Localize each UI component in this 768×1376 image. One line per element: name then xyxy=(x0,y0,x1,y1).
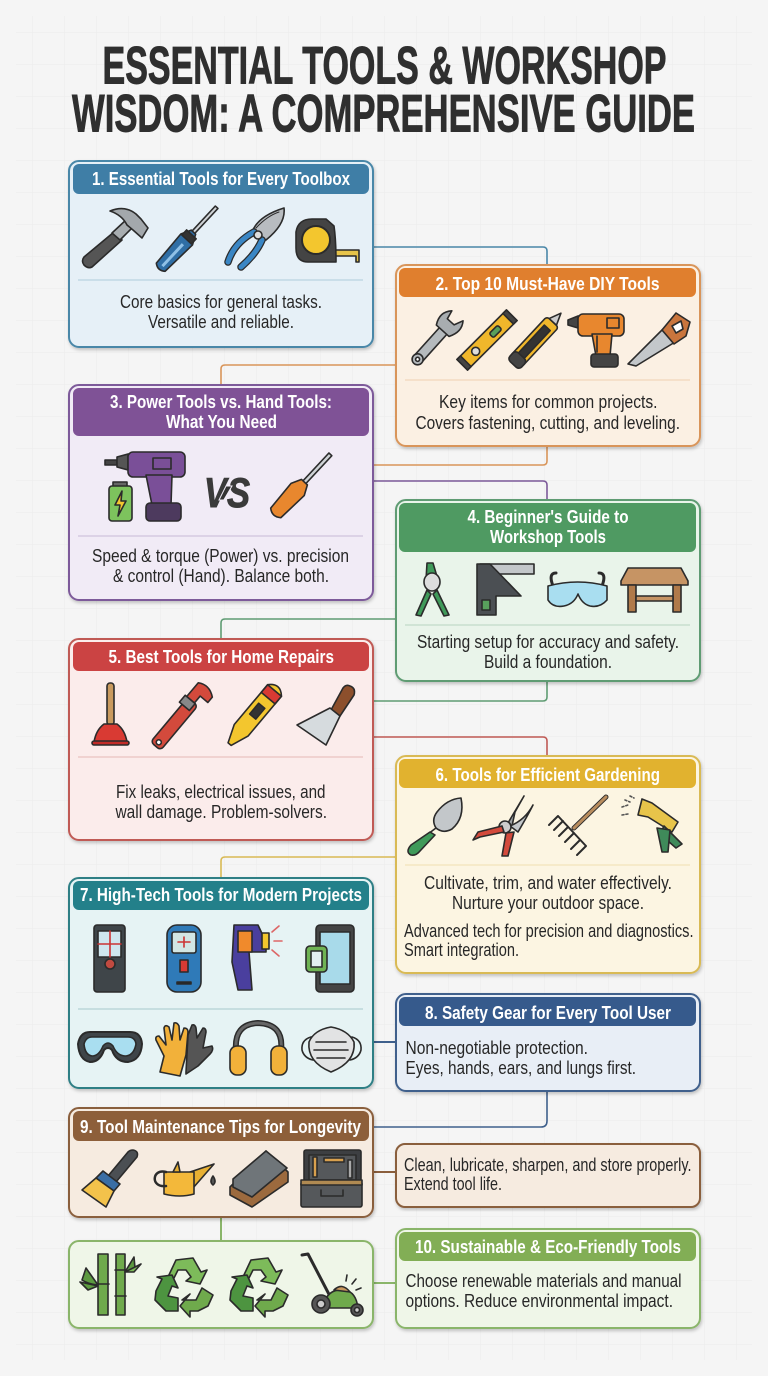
icon: dust mask xyxy=(302,1027,361,1072)
body: 4: Starting setup for accuracy and safety. xyxy=(417,631,679,652)
body: 6: Nurture your outdoor space. xyxy=(452,892,644,913)
body: 7 description: Advanced tech for precision and diagnostics. xyxy=(404,920,694,941)
header: 7: 7. High-Tech Tools for Modern Projects xyxy=(80,884,362,905)
body: 5: wall damage. Problem-solvers. xyxy=(115,801,327,822)
body: 2: Covers fastening, cutting, and leveling. xyxy=(416,412,680,433)
body: 3 xyxy=(92,545,349,586)
icon: sharpening stone xyxy=(230,1151,288,1207)
panel: 9 maintenance xyxy=(69,1108,373,1217)
icon: bamboo xyxy=(80,1254,141,1315)
icon: safety glasses xyxy=(548,573,607,606)
icon: stud finder xyxy=(167,925,201,992)
header: 1 xyxy=(73,164,369,194)
panel: 2 must-have DIY xyxy=(396,265,700,446)
icon: hand saw xyxy=(628,313,690,366)
icon: recycling symbol 1 xyxy=(155,1258,213,1317)
icon: pipe wrench xyxy=(148,679,215,754)
body: 1: Core basics for general tasks. xyxy=(120,291,322,312)
icon: push mower xyxy=(302,1254,363,1316)
body: 8: Eyes, hands, ears, and lungs first. xyxy=(406,1057,636,1078)
divider xyxy=(405,624,690,626)
panel: 1 essential tools xyxy=(69,161,373,347)
body: 6: Cultivate, trim, and water effectively. xyxy=(424,872,672,893)
panel: 7 high-tech xyxy=(69,878,373,1088)
body: 5 xyxy=(115,781,327,822)
icon: pruning shears xyxy=(473,796,533,856)
body: 1: Versatile and reliable. xyxy=(148,311,294,332)
panel: 5 home repairs xyxy=(69,639,373,840)
header: 2: 2. Top 10 Must-Have DIY Tools xyxy=(436,273,660,294)
icon: laser measure xyxy=(94,925,125,992)
body: 5: Fix leaks, electrical issues, and xyxy=(116,781,326,802)
panel: 6 gardening (with stray text) xyxy=(396,756,700,973)
icon: plunger xyxy=(92,683,129,745)
header: 3 xyxy=(73,388,369,436)
title xyxy=(72,36,695,144)
icon: paint brush xyxy=(82,1150,138,1207)
icon: workbench xyxy=(621,568,688,612)
icon: oil can xyxy=(155,1162,215,1196)
header: 4: Workshop Tools xyxy=(490,526,606,547)
body: 2: Key items for common projects. xyxy=(439,391,658,412)
header: 10: 10. Sustainable & Eco-Friendly Tools xyxy=(415,1236,681,1257)
icon: adjustable wrench xyxy=(405,307,466,371)
icon: screwdriver xyxy=(153,202,222,275)
header: 3: What You Need xyxy=(166,411,277,432)
panel: 4 beginner guide xyxy=(396,500,700,681)
body: 4: Build a foundation. xyxy=(484,651,612,672)
panel: 9 description xyxy=(396,1144,700,1207)
icon: pliers xyxy=(228,208,284,267)
body: 1 xyxy=(120,291,322,332)
header: 6: 6. Tools for Efficient Gardening xyxy=(436,764,660,785)
body: 4 xyxy=(417,631,679,672)
icon: spring clamp xyxy=(416,563,449,616)
header: 1: 1. Essential Tools for Every Toolbox xyxy=(92,168,351,189)
header: 4: 4. Beginner's Guide to xyxy=(468,506,628,527)
icon: battery xyxy=(109,482,132,521)
body: 3: Speed & torque (Power) vs. precision xyxy=(92,545,349,566)
panel: 10 sustainable xyxy=(396,1229,700,1328)
body: 10: options. Reduce environmental impact. xyxy=(406,1290,673,1311)
header: 6 xyxy=(399,759,696,788)
body: 7 description: Smart integration. xyxy=(404,939,519,960)
icon: putty knife xyxy=(297,685,354,745)
panel: 9 description: Extend tool life. xyxy=(404,1173,502,1194)
divider xyxy=(78,535,363,537)
icon: combination square xyxy=(477,564,534,615)
icon: smartphone xyxy=(306,925,354,992)
icon: orange screwdriver xyxy=(267,448,337,521)
header: 4 xyxy=(399,503,696,552)
icon: gloves xyxy=(156,1023,213,1076)
header: 8 xyxy=(399,997,696,1026)
icon: spirit level xyxy=(457,310,517,370)
icon: hammer xyxy=(82,209,148,268)
header: 9 xyxy=(73,1111,369,1141)
icon: orange drill xyxy=(568,314,624,367)
body: 8 xyxy=(406,1037,636,1078)
icon: recycling symbol 2 xyxy=(230,1258,288,1317)
icon: purple drill xyxy=(105,452,185,521)
panel: 10 icons xyxy=(69,1241,373,1328)
panel: 8 safety gear xyxy=(396,994,700,1091)
icon: VS lightning: VS xyxy=(204,469,250,516)
body: 3: & control (Hand). Balance both. xyxy=(113,565,329,586)
icon: spray nozzle xyxy=(622,796,682,852)
header: 5: 5. Best Tools for Home Repairs xyxy=(108,646,334,667)
panel: 3 power vs hand xyxy=(69,385,373,600)
icon: goggles xyxy=(78,1032,142,1062)
body: 10: Choose renewable materials and manual xyxy=(406,1270,682,1291)
header: 7 xyxy=(73,881,369,910)
icon: VS lightning xyxy=(204,448,250,527)
body: 6 xyxy=(424,872,672,913)
header: 3: 3. Power Tools vs. Hand Tools: xyxy=(110,391,332,412)
icon: tool case xyxy=(301,1150,362,1207)
body: 8: Non-negotiable protection. xyxy=(406,1037,588,1058)
header: 9: 9. Tool Maintenance Tips for Longevity xyxy=(80,1116,362,1137)
divider xyxy=(405,864,690,866)
divider xyxy=(78,756,363,758)
header: 5 xyxy=(73,642,369,671)
divider xyxy=(405,379,690,381)
body: 7 description xyxy=(404,920,694,960)
header: 8: 8. Safety Gear for Every Tool User xyxy=(425,1002,671,1023)
icon: utility knife xyxy=(507,308,567,370)
icon: voltage tester xyxy=(223,681,285,750)
connectors between panels xyxy=(221,247,547,1283)
header: 10 xyxy=(399,1232,696,1261)
divider xyxy=(78,1008,363,1010)
header: 2 xyxy=(399,268,696,297)
panel: 9 description: Clean, lubricate, sharpen, and store properly. xyxy=(404,1154,692,1175)
body: 10 xyxy=(406,1270,682,1311)
icon: thermal camera xyxy=(232,925,282,990)
icon: earmuffs xyxy=(230,1023,287,1075)
divider xyxy=(78,279,363,281)
icon: trowel xyxy=(408,798,462,855)
body: 2 xyxy=(416,391,680,433)
icon: tape measure xyxy=(296,219,359,262)
icon: rake xyxy=(549,797,606,855)
